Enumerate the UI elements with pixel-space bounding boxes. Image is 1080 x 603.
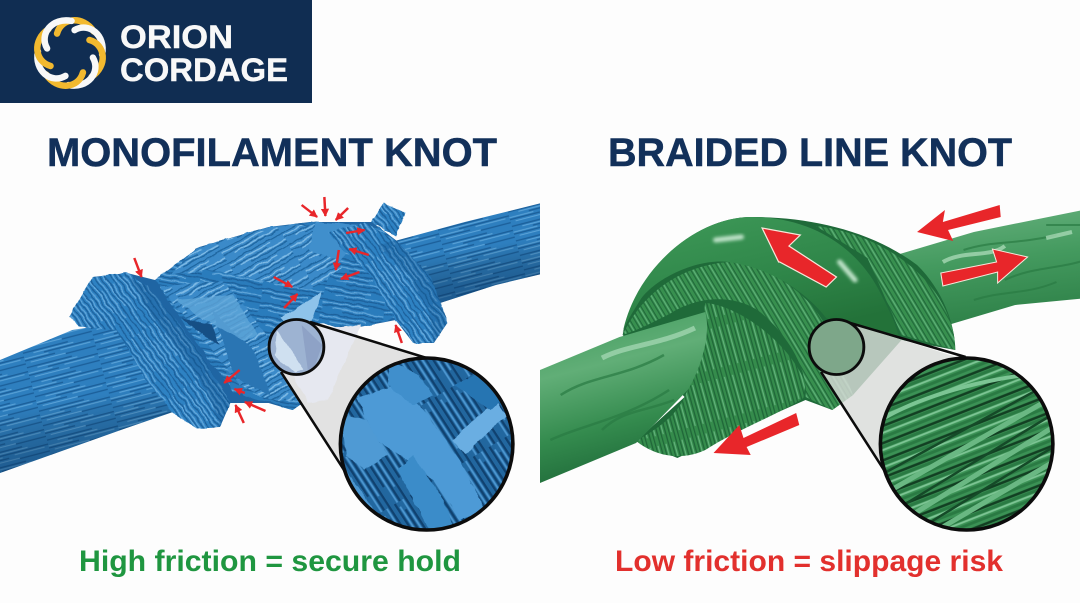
red arrow: pointing left (917, 205, 1001, 241)
heading: monofilament knot: MONOFILAMENT KNOT (47, 131, 497, 175)
left coil wrap (69, 273, 230, 428)
small magnifier circle (809, 320, 864, 374)
icon: interlocking rope ring (30, 13, 110, 93)
frayed stub (372, 203, 406, 236)
logo wordmark (120, 19, 288, 88)
upper right rope (896, 207, 1080, 325)
small magnifier circle (269, 320, 324, 374)
panel: monofilament knot illustration (0, 197, 558, 535)
large magnified fibre circle (336, 355, 522, 535)
left rope end (0, 328, 172, 473)
large magnified strands circle (876, 355, 1062, 535)
caption: high friction: High friction = secure hold (79, 545, 461, 578)
zoom wedge (821, 322, 966, 470)
knot dark base (623, 217, 955, 458)
right rope end (396, 203, 540, 303)
red arrow: pointing right (941, 249, 1028, 286)
logo banner (0, 0, 312, 103)
right coil wrap (327, 223, 447, 343)
red arrow: lower left (714, 413, 799, 455)
caption: low friction: Low friction = slippage risk (615, 545, 1003, 578)
frayed white fibres (293, 325, 362, 402)
logo wordmark: CORDAGE (120, 52, 288, 88)
wedge outline (281, 322, 427, 470)
lower twisted strands (636, 303, 805, 456)
red arrow: up-left on arch (762, 228, 836, 287)
front arc strand bundle (623, 262, 853, 410)
panel: braided line knot illustration (540, 205, 1080, 535)
logo wordmark: ORION (120, 19, 233, 55)
knot dark base (69, 222, 447, 428)
smooth arch strand (623, 217, 899, 340)
lower left rope (540, 312, 707, 483)
back strand coil (816, 226, 955, 350)
wedge outline (821, 322, 966, 470)
heading: braided line knot: BRAIDED LINE KNOT (608, 131, 1012, 175)
zoom wedge (281, 325, 416, 462)
central knot mass (155, 222, 400, 410)
red pressure arrows (134, 197, 402, 423)
